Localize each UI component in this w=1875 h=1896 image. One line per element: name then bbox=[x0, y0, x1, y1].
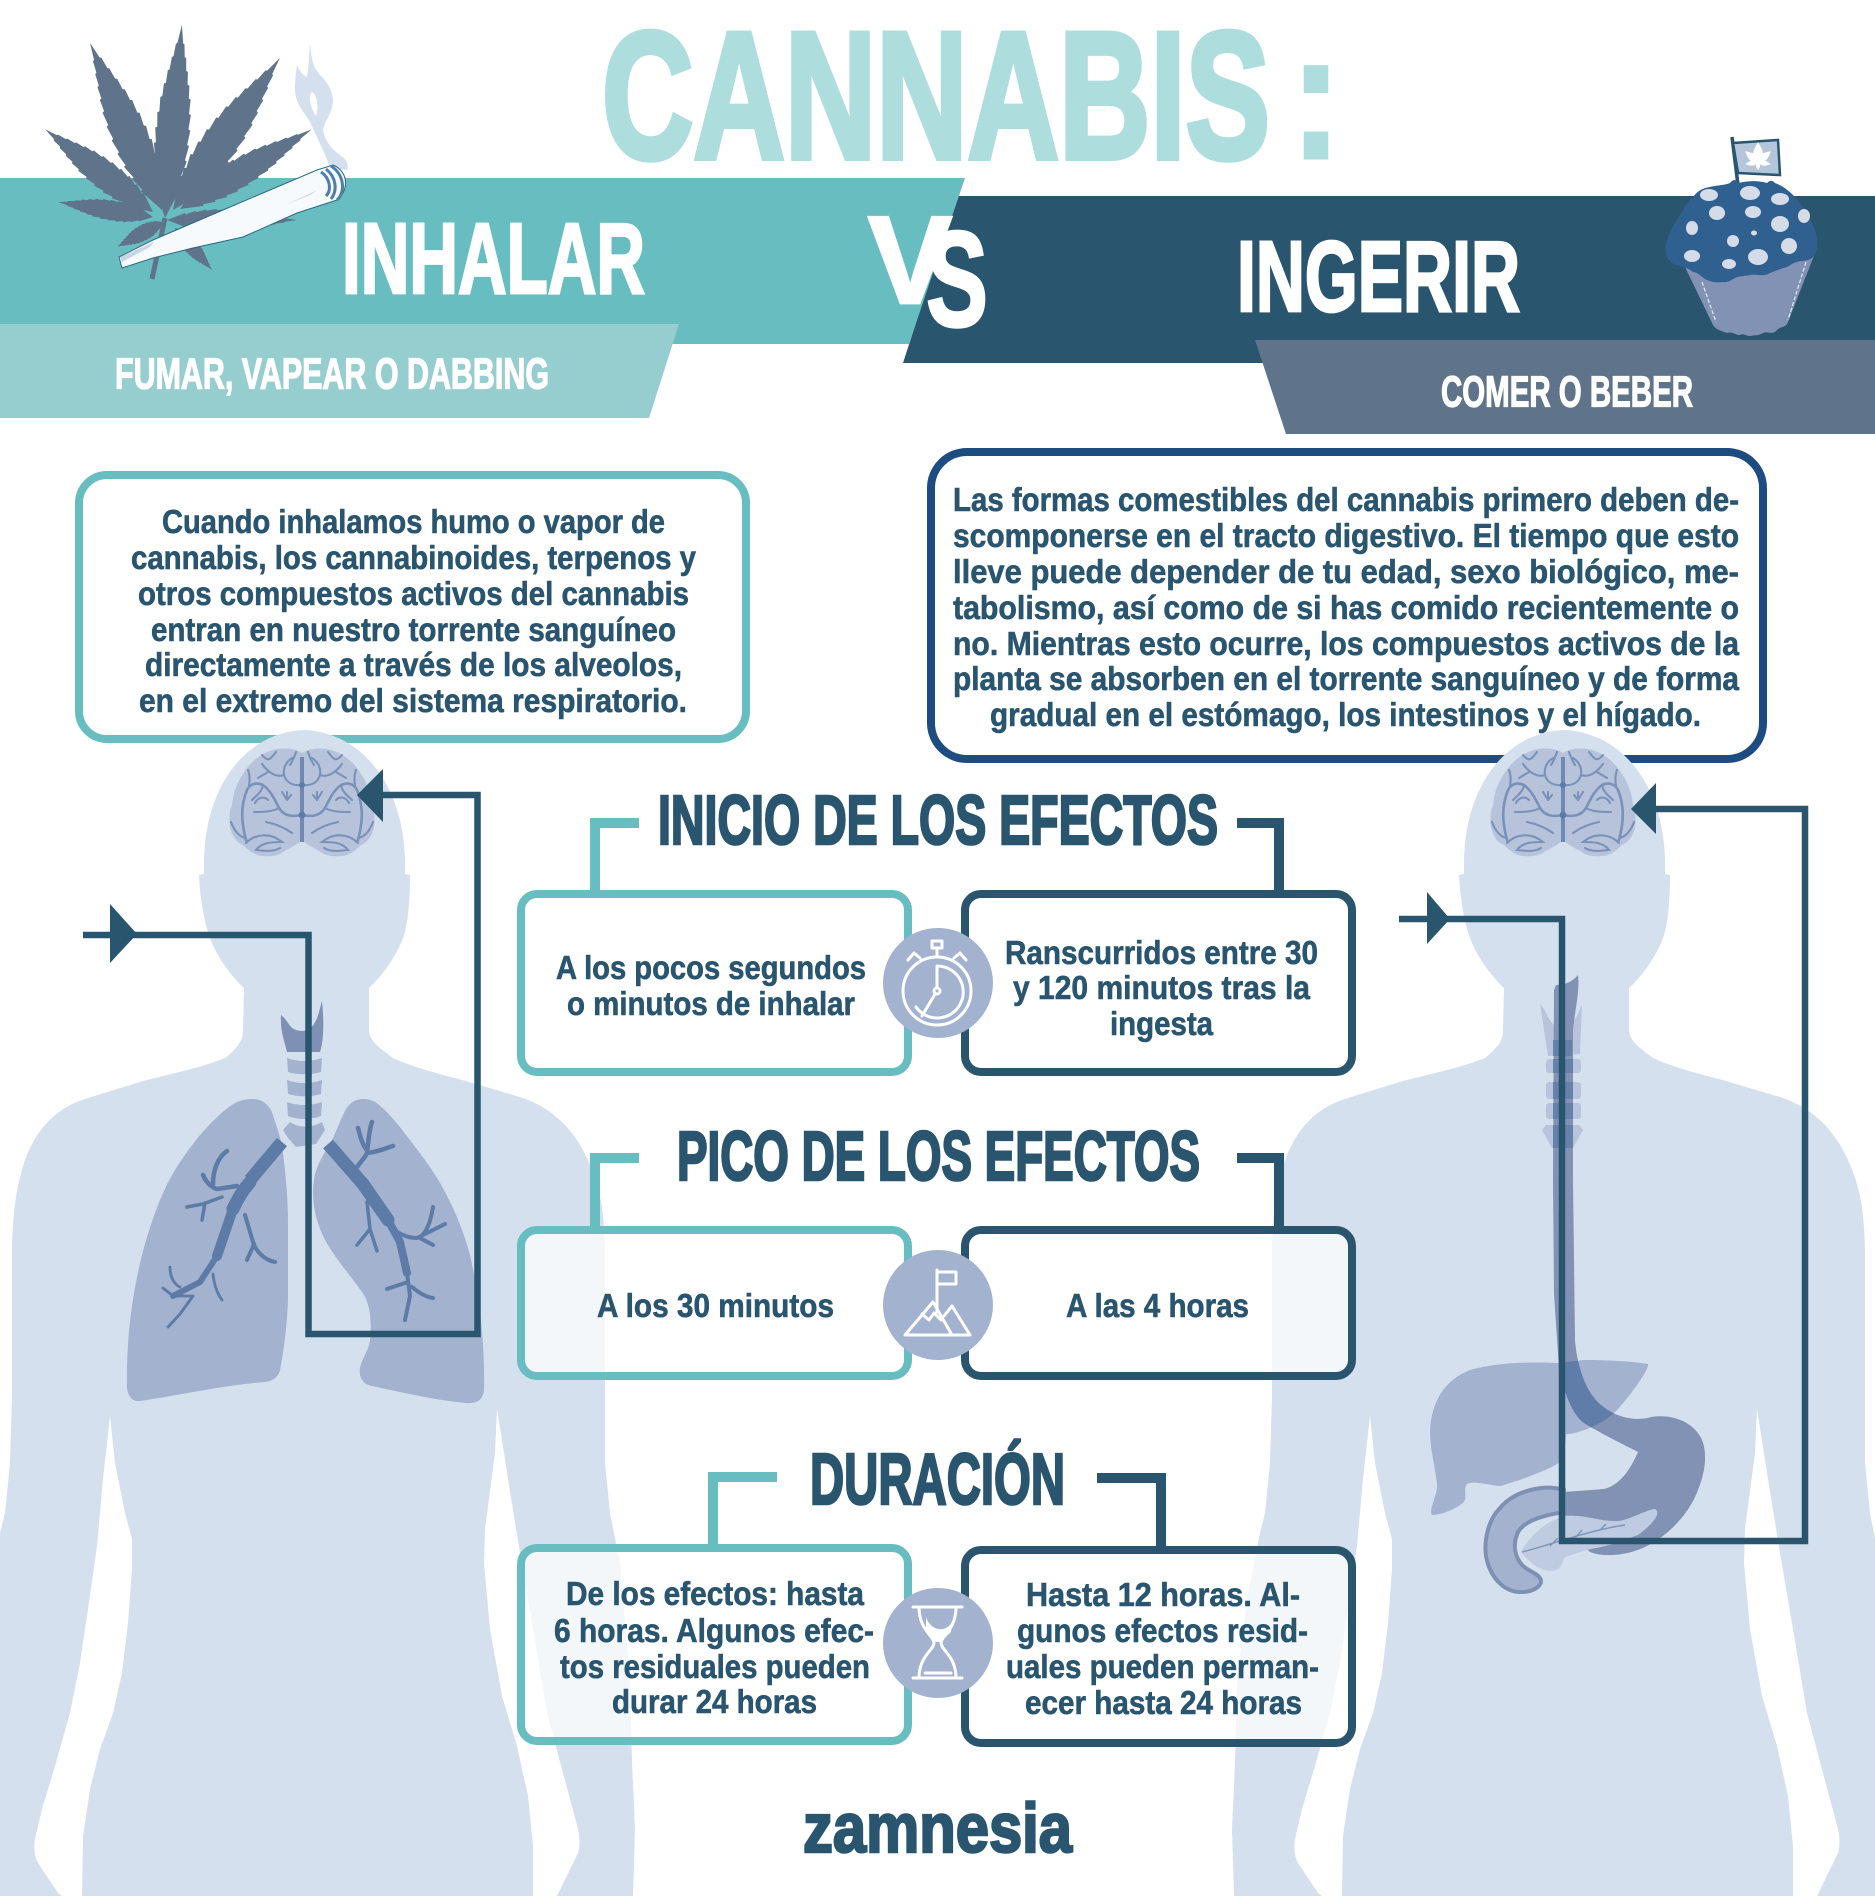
left bronchi bbox=[163, 1142, 282, 1327]
liver bbox=[1430, 1360, 1648, 1515]
panel: ingerir description: Las formas comestibles del cannabis primero deben de- bbox=[953, 481, 1739, 518]
muffin chips bbox=[1684, 186, 1810, 269]
organ: lungs and trachea bbox=[127, 1001, 484, 1403]
laryngeal rings bbox=[1540, 1004, 1583, 1148]
band: ingerir dark bbox=[903, 196, 1875, 363]
panel: inhalar description: directamente a través de los alveolos, bbox=[145, 646, 682, 683]
left lung bbox=[127, 1099, 288, 1401]
muffin wrapper bbox=[1685, 248, 1817, 336]
organ: left brain bbox=[229, 748, 375, 856]
box right: A las 4 horas bbox=[1066, 1287, 1249, 1324]
figure: left body silhouette bbox=[0, 730, 635, 1896]
band: inhalar background bbox=[0, 178, 1875, 434]
thyroid cartilage bbox=[281, 1001, 323, 1052]
connector left bbox=[595, 1158, 639, 1228]
box right: gunos efectos resid- bbox=[1017, 1612, 1308, 1649]
panel: ingerir description bbox=[931, 452, 1763, 759]
heading: vs bbox=[868, 192, 988, 355]
tracheal rings bbox=[283, 1058, 325, 1147]
panel: inhalar description: otros compuestos activos del cannabis bbox=[138, 575, 689, 612]
heading: INICIO DE LOS EFECTOS bbox=[658, 781, 1218, 859]
arrow: left body pathway bbox=[83, 769, 478, 1334]
section: pico de los efectos bbox=[521, 1117, 1352, 1376]
esophagus over liver bbox=[1558, 1360, 1614, 1428]
icon: joint bbox=[119, 165, 346, 268]
panel: inhalar description: cannabis, los cannabinoides, terpenos y bbox=[131, 539, 697, 576]
subheading: comer o beber: COMER O BEBER bbox=[1441, 368, 1693, 416]
box left: tos residuales pueden bbox=[560, 1648, 870, 1685]
panel: ingerir description: scomponerse en el tracto digestivo. El tiempo que esto bbox=[953, 517, 1739, 554]
box right: ingesta bbox=[1110, 1005, 1214, 1042]
icon: smoke bbox=[295, 43, 348, 170]
panel: inhalar description bbox=[79, 475, 746, 739]
panel: ingerir description: lleve puede depender de tu edad, sexo biológico, me- bbox=[953, 553, 1739, 590]
icon: muffin bbox=[1666, 137, 1817, 336]
esophagus and stomach bbox=[1553, 975, 1705, 1555]
muffin flag bbox=[1732, 137, 1780, 185]
heading: vs: S bbox=[926, 203, 988, 355]
panel: ingerir description: tabolismo, así como de si has comido recientemente o bbox=[953, 589, 1739, 626]
box right: uales pueden perman- bbox=[1006, 1648, 1319, 1685]
icon: cannabis leaf bbox=[36, 23, 319, 279]
box right bbox=[965, 894, 1352, 1072]
arrow: right body pathway bbox=[1399, 783, 1805, 1541]
panel: inhalar description: en el extremo del sistema respiratorio. bbox=[139, 682, 687, 719]
connector right bbox=[1237, 823, 1279, 892]
box left: 6 horas. Algunos efec- bbox=[554, 1612, 874, 1649]
panel: inhalar description: entran en nuestro torrente sanguíneo bbox=[151, 611, 676, 648]
box left bbox=[521, 894, 908, 1072]
panel: ingerir description: planta se absorben en el torrente sanguíneo y de forma bbox=[953, 660, 1740, 697]
box right: Ranscurridos entre 30 bbox=[1005, 934, 1318, 971]
heading: PICO DE LOS EFECTOS bbox=[677, 1117, 1200, 1195]
box left: o minutos de inhalar bbox=[567, 985, 855, 1022]
section: inicio de los efectos bbox=[521, 781, 1352, 1072]
band: inhalar subtitle strip bbox=[0, 324, 679, 418]
pancreas bbox=[1521, 1509, 1657, 1571]
connector right bbox=[1097, 1478, 1161, 1548]
box right: ecer hasta 24 horas bbox=[1025, 1684, 1302, 1721]
muffin wrapper seams bbox=[1702, 262, 1806, 322]
box left: De los efectos: hasta bbox=[566, 1575, 865, 1612]
box right: Hasta 12 horas. Al- bbox=[1026, 1576, 1300, 1613]
band: inhalar teal bbox=[0, 178, 965, 344]
panel: inhalar description: Cuando inhalamos humo o vapor de bbox=[162, 503, 665, 540]
esophagus over rings bbox=[1553, 1040, 1573, 1148]
heading: inhalar: INHALAR bbox=[342, 203, 645, 315]
connector left bbox=[595, 823, 639, 892]
heading: DURACIÓN bbox=[810, 1439, 1065, 1520]
box left: durar 24 horas bbox=[612, 1683, 817, 1720]
pancreas ducts bbox=[1522, 1524, 1625, 1552]
icon: stopwatch bbox=[883, 928, 993, 1038]
connector left bbox=[713, 1477, 777, 1546]
organ: digestive tract bbox=[1430, 975, 1705, 1592]
heading: vs: V bbox=[868, 192, 952, 330]
box left: A los 30 minutos bbox=[597, 1287, 834, 1324]
panel: ingerir description: gradual en el estómago, los intestinos y el hígado. bbox=[990, 696, 1701, 733]
duodenum bbox=[1486, 1488, 1564, 1592]
box left bbox=[521, 1230, 908, 1376]
figure: right body silhouette bbox=[1232, 730, 1875, 1896]
box right bbox=[965, 1550, 1352, 1743]
panel: ingerir description: no. Mientras esto ocurre, los compuestos activos de la bbox=[953, 625, 1740, 662]
box right: y 120 minutos tras la bbox=[1013, 969, 1311, 1006]
icon: mountain with flag bbox=[883, 1250, 993, 1360]
band: ingerir subtitle strip bbox=[1255, 340, 1875, 434]
heading: ingerir: INGERIR bbox=[1237, 221, 1520, 333]
subheading: fumar, vapear o dabbing: FUMAR, VAPEAR O DABBING bbox=[115, 350, 549, 398]
box right bbox=[965, 1230, 1352, 1376]
organ: right brain bbox=[1490, 748, 1636, 856]
title: CANNABIS bbox=[602, 0, 1270, 197]
connector right bbox=[1237, 1158, 1279, 1228]
right lung bbox=[313, 1099, 484, 1403]
right bronchi bbox=[328, 1122, 445, 1320]
muffin top bbox=[1666, 180, 1817, 282]
box left bbox=[521, 1548, 908, 1741]
box left: A los pocos segundos bbox=[556, 949, 866, 986]
title: : bbox=[1290, 0, 1342, 197]
section: duración bbox=[521, 1439, 1352, 1743]
icon: hourglass bbox=[883, 1588, 993, 1698]
logo: zamnesia: zamnesia bbox=[803, 1789, 1073, 1867]
